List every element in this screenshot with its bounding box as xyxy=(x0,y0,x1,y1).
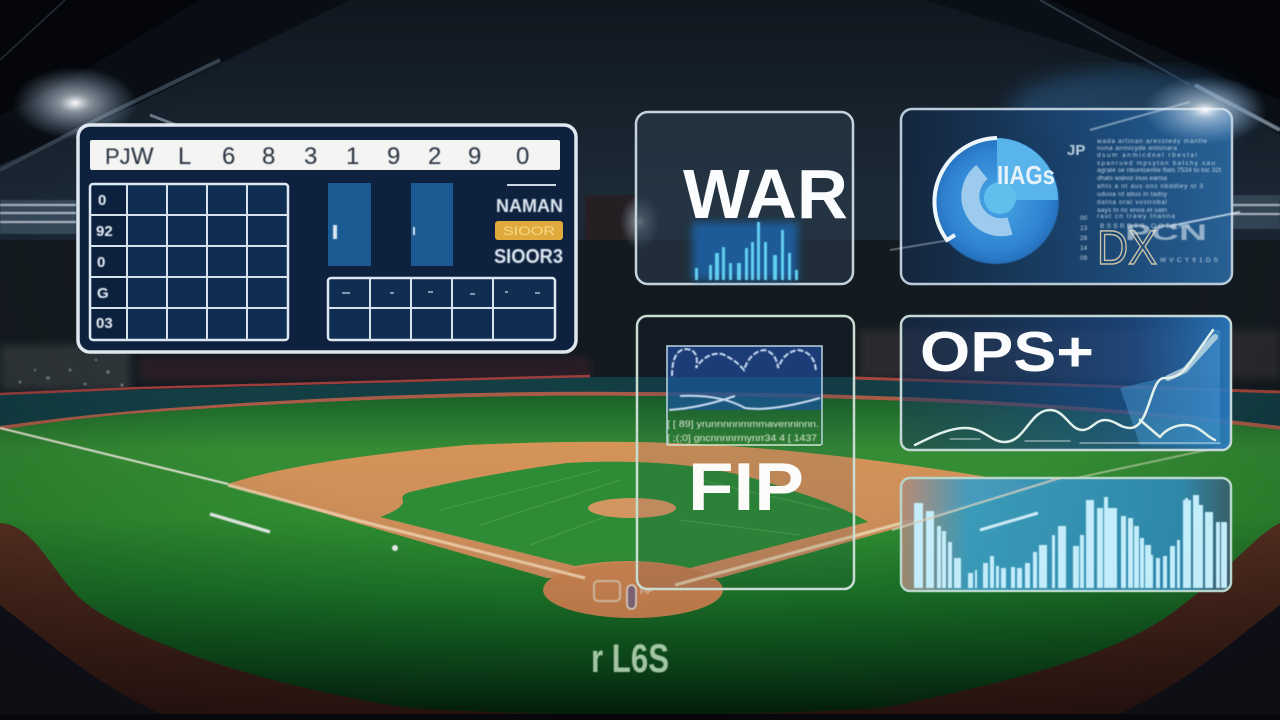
scoreboard header row: W xyxy=(131,143,154,170)
floodlight: right xyxy=(1143,76,1267,144)
foul lines xyxy=(0,428,1230,585)
OPS+ label: OPS+ xyxy=(920,320,1094,384)
FIP label: FIP xyxy=(688,449,804,525)
scoreboard header row: PJ xyxy=(105,144,131,169)
scoreboard header row: 6 xyxy=(222,143,235,170)
donut chart xyxy=(933,138,1059,264)
left score grid: 03 xyxy=(96,315,113,332)
blue column bars xyxy=(328,183,453,266)
stats text list: nuna anmicyde entonara xyxy=(1097,145,1177,152)
side labels: SIOOR xyxy=(503,224,555,238)
stats text list: WVCY91DS xyxy=(1160,257,1219,264)
left score grid xyxy=(90,184,288,340)
scoreboard header row xyxy=(90,140,560,170)
bars xyxy=(914,495,1227,588)
left score grid: 92 xyxy=(96,223,113,240)
panel: bar chart xyxy=(892,478,1231,591)
infield mowing stripes xyxy=(440,470,830,545)
side labels: SIOOR3 xyxy=(494,246,563,268)
FIP mini chart: [ [ 89] yrunnnnnmmmavenninnn. xyxy=(667,419,819,429)
panel: WAR xyxy=(636,112,853,284)
left score grid: 0 xyxy=(97,254,105,271)
mound xyxy=(588,498,676,518)
dark surround corners xyxy=(0,605,175,720)
left score grid: G xyxy=(97,285,109,302)
infield grass xyxy=(380,462,868,568)
home plate circle xyxy=(543,562,723,618)
stats text list: agrate se nbuntcentie flats 7534 to toc 32t xyxy=(1097,167,1221,174)
scoreboard header row: 1 xyxy=(346,143,359,170)
left score grid: 0 xyxy=(98,192,106,209)
DX label: DX xyxy=(1097,222,1157,275)
WAR label: WAR xyxy=(683,155,848,233)
scoreboard header row: 0 xyxy=(516,143,529,170)
WAR bars xyxy=(692,222,798,280)
field line crossing xyxy=(892,478,1060,530)
stats text list: dsum anmicdnel rbestal xyxy=(1097,152,1198,159)
scoreboard header row: L xyxy=(178,143,191,170)
grass field xyxy=(0,396,1280,720)
infield dirt xyxy=(228,442,1035,578)
stats text list: BSSRDTS OOTSAN xyxy=(1100,223,1190,230)
stats text list: wada artinan aresstedy mantle xyxy=(1096,138,1207,145)
lower dark surround xyxy=(0,520,1280,720)
stats text list: 09 xyxy=(1080,255,1088,262)
stats text list: raut cn trawy tnanna xyxy=(1097,213,1175,220)
stats text list: spanrued mpsyton batchy sau xyxy=(1097,160,1215,167)
scoreboard header row: 9 xyxy=(387,143,400,170)
scoreboard header row: 3 xyxy=(304,143,317,170)
stats text list: aays tn nc enoa et satn xyxy=(1097,207,1167,214)
panel: donut stats xyxy=(890,102,1240,284)
crowd speckle xyxy=(18,359,124,386)
stats text list: uduoa rd abus in tadsy xyxy=(1097,191,1168,198)
light streaks xyxy=(890,102,1240,250)
right score grid xyxy=(328,278,555,340)
stats text list: 00 xyxy=(1080,215,1088,222)
stand lights band xyxy=(0,195,1280,260)
stats text list: ahts a nt aus ons nbddley st 3 xyxy=(1097,183,1203,190)
donut chart: IIAGs xyxy=(997,160,1055,190)
scoreboard header row: 9 xyxy=(468,143,481,170)
outer arc xyxy=(934,138,997,240)
panel: OPS+ xyxy=(901,316,1231,450)
stats text list: 28 xyxy=(1080,235,1088,242)
side labels xyxy=(494,185,563,268)
side labels: NAMAN xyxy=(496,196,563,216)
home plate graphic xyxy=(594,581,652,609)
home plate graphic: FIP xyxy=(640,587,652,596)
stats text list: dhats walnor inuo eansa xyxy=(1097,175,1167,182)
stats text list: 14 xyxy=(1080,245,1088,252)
scoreboard header row: 8 xyxy=(262,143,275,170)
panel: FIP xyxy=(637,316,854,589)
stats text list: datna orat vostrobal xyxy=(1097,199,1168,206)
line chart xyxy=(915,330,1220,445)
FIP mini chart: [ ;(;0] gncnnnnrrnynrr34 4 [ 1437 xyxy=(667,433,817,443)
panel: donut stats: PCN xyxy=(1125,220,1207,245)
stats text list: JP xyxy=(1067,142,1085,159)
stats text list: 13 xyxy=(1080,225,1088,232)
outfield wall xyxy=(0,377,1280,430)
crowd xyxy=(0,240,1280,395)
area under line xyxy=(1120,330,1220,445)
panel: scoreboard xyxy=(78,125,576,352)
FIP mini chart xyxy=(667,346,822,445)
bottom field logo: r L6S xyxy=(591,637,669,681)
small trend stroke xyxy=(980,513,1038,530)
stats text list xyxy=(1067,138,1221,264)
scoreboard header row: 2 xyxy=(428,143,441,170)
floodlights xyxy=(13,67,137,139)
roof structure xyxy=(0,0,1280,170)
